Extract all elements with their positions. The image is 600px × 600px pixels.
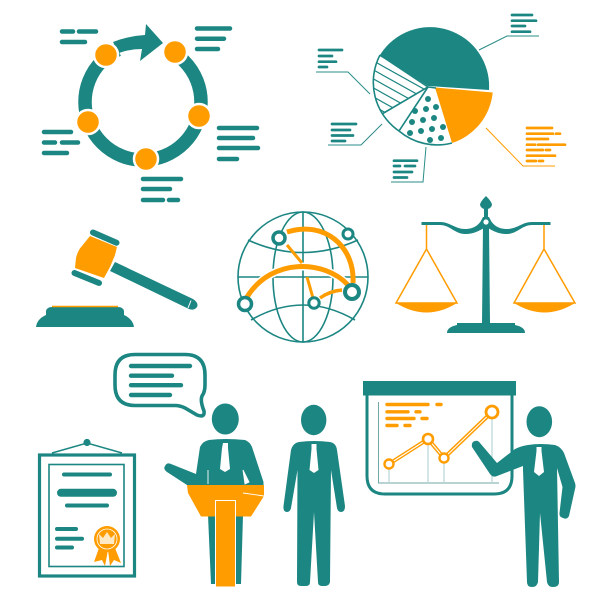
podium [187,485,264,587]
gavel base [36,307,134,327]
standing man [283,405,345,586]
pie chart [316,15,565,182]
cycle text bars [44,28,258,200]
presenter head [526,406,552,437]
scale pole [482,226,490,323]
speaker at podium [164,404,264,587]
gavel head [75,236,117,278]
presenter body [472,441,576,587]
presenter tie [534,447,544,476]
hanger [52,443,122,453]
scales of justice [396,196,575,333]
gavel caps [74,232,116,283]
chart line [384,406,498,468]
dotted sector [407,96,446,143]
certificate [40,439,134,576]
teal sector [380,27,489,90]
top gap mask [118,44,165,50]
scale pans [396,223,575,303]
speaker arm gaps [208,470,249,484]
orange sector [435,88,493,143]
presentation board [363,381,516,494]
ring [85,44,201,160]
route halo [247,267,348,297]
cycle arrow [113,24,163,61]
presenter [472,406,576,587]
gavel [36,232,198,327]
speaker head [212,404,239,434]
speech bubble [115,354,205,416]
pie label bars teal [319,15,536,178]
frame [40,455,134,576]
board top bar [363,381,516,396]
bubble bars [131,366,190,395]
globe grid [238,212,368,342]
man tie [310,444,318,473]
ribbon seal [94,526,121,566]
orange routes [247,229,353,298]
gavel handle [110,262,198,310]
chart axes [378,402,499,483]
cycle nodes [76,40,211,171]
cycle diagram [44,24,258,200]
man body [283,441,345,586]
certificate text bars [57,474,110,548]
pie outlines [373,55,452,145]
pie label bars orange [527,128,565,161]
board frame [367,392,512,494]
globe [238,212,368,342]
board text bars [387,404,441,426]
scale beam [422,217,550,234]
finial [480,196,492,218]
speaker tie [220,443,230,472]
striped sector [374,56,424,112]
speaker body [164,439,264,485]
speaker legs [208,515,243,584]
base highlight [52,306,118,308]
scale base [447,323,525,333]
leader lines [316,36,555,182]
man head [301,405,326,435]
route nodes [238,229,359,310]
